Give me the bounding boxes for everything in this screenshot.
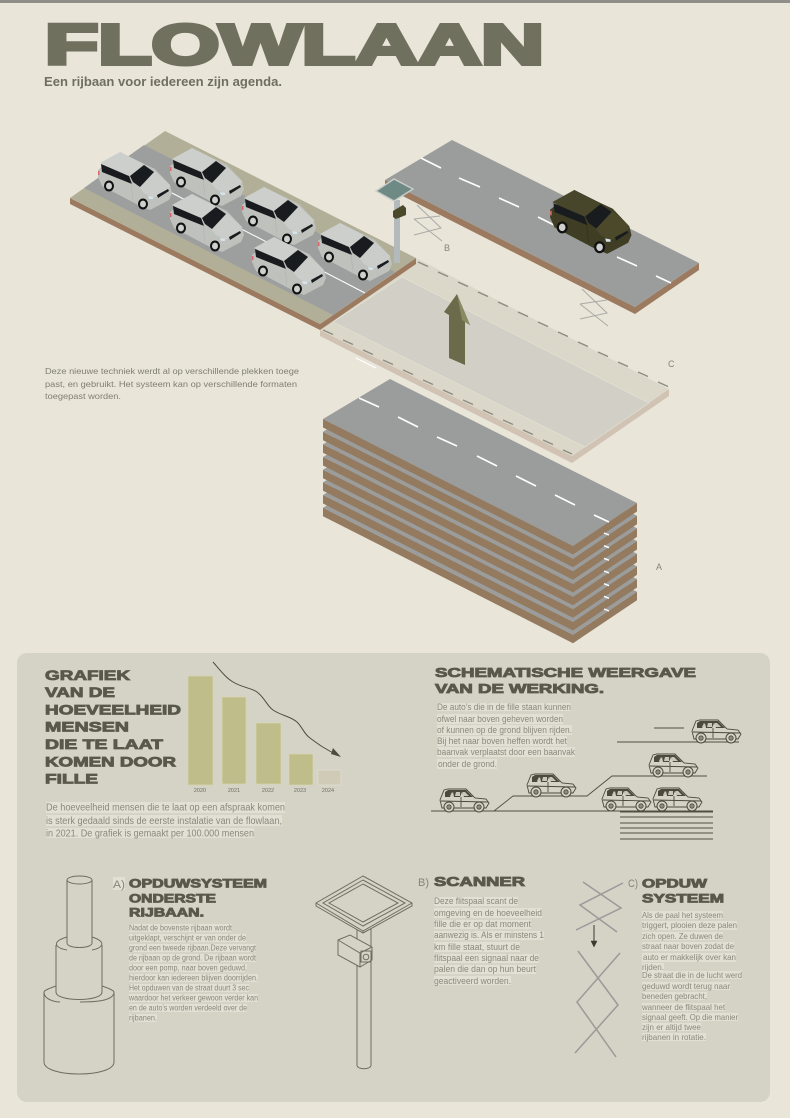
heading opduwsysteem: OPDUWSYSTEEM bbox=[129, 876, 267, 890]
label A): A) bbox=[113, 879, 125, 891]
text A bbox=[128, 924, 258, 1022]
text C: Als de paal het systeem bbox=[642, 910, 723, 920]
text B: aanwezig is. Als er minstens 1 bbox=[434, 930, 544, 940]
text C: auto er makkelijk over kan bbox=[643, 952, 736, 962]
middle platform bbox=[320, 258, 669, 463]
label B: B bbox=[444, 243, 450, 253]
text B: geactiveerd worden. bbox=[434, 976, 511, 986]
text C: geduwd wordt terug naar bbox=[642, 981, 730, 991]
text C: De straat die in de lucht werd bbox=[642, 970, 742, 980]
intro paragraph: past, en gebruikt. Het systeem kan op verschillende formaten bbox=[45, 379, 297, 389]
upper road with dark car bbox=[385, 140, 699, 314]
schematic paragraph: onder de grond. bbox=[438, 759, 497, 769]
left road with traffic jam bbox=[70, 131, 416, 330]
text A: en de auto’s worden verdeeld over de bbox=[129, 1004, 247, 1012]
text C: signaal geeft. Op die manier bbox=[642, 1012, 738, 1022]
text B: Deze flitspaal scant de bbox=[434, 896, 518, 906]
intro paragraph: toegepast worden. bbox=[45, 391, 121, 401]
text C: triggert, plooien deze palen bbox=[642, 920, 737, 930]
car 1 bbox=[98, 152, 172, 210]
text B: flitspaal een signaal naar de bbox=[434, 953, 539, 963]
label B): B) bbox=[418, 877, 429, 889]
schematic paragraph: Bij het naar boven heffen wordt het bbox=[437, 736, 567, 746]
chart paragraph: is sterk gedaald sinds de eerste instalatie van de flowlaan, bbox=[46, 816, 282, 827]
icon: telescopic cylinder bbox=[44, 876, 114, 1074]
line car d bbox=[653, 788, 702, 811]
schematic diagram bbox=[431, 720, 741, 839]
car 6 bbox=[318, 223, 392, 281]
schematic heading bbox=[435, 665, 696, 696]
schematic heading: SCHEMATISCHE WEERGAVE bbox=[435, 665, 696, 680]
text C: zijn er altijd twee bbox=[642, 1022, 701, 1032]
text C: wanneer de flitspaal het bbox=[641, 1002, 726, 1012]
text A: Nadat de bovenste rijbaan wordt bbox=[129, 924, 233, 932]
schematic paragraph: De auto’s die in de fille staan kunnen bbox=[437, 702, 571, 712]
icon: scissor lift closed and open bbox=[575, 882, 623, 1057]
text A: hierdoor kan iedereen blijven doorrijden. bbox=[129, 974, 258, 982]
arrow up bbox=[444, 294, 470, 365]
heading opduw systeem bbox=[642, 876, 724, 906]
chart paragraph: in 2021. De grafiek is gemaakt per 100.000 mensen bbox=[46, 828, 254, 840]
arrow down bbox=[591, 925, 597, 947]
schematic paragraph: ofwel naar boven geheven worden bbox=[437, 714, 563, 724]
line car f bbox=[692, 720, 741, 743]
text C: rijden. bbox=[642, 962, 664, 972]
chart heading: VAN DE bbox=[45, 684, 115, 700]
subtitle: Een rijbaan voor iedereen zijn agenda. bbox=[44, 74, 282, 89]
bar chart: 2020 bbox=[194, 788, 206, 794]
text B: km fille staat, stuurt de bbox=[434, 942, 520, 952]
scissor lift C bbox=[580, 289, 608, 326]
scanner pole on road bbox=[376, 179, 413, 263]
intro paragraph bbox=[45, 366, 299, 401]
schematic paragraph: of kunnen op de grond blijven rijden. bbox=[437, 725, 572, 735]
line car c bbox=[602, 788, 651, 811]
icon: scanner pole bbox=[316, 876, 412, 1069]
chart heading: MENSEN bbox=[45, 718, 129, 734]
top edge bar bbox=[0, 0, 790, 3]
bottom panel bbox=[17, 653, 770, 1102]
scissor lift B bbox=[414, 205, 442, 241]
dark car bbox=[550, 190, 632, 254]
bar chart: 2024 bbox=[322, 788, 334, 794]
chart heading: GRAFIEK bbox=[45, 667, 130, 683]
bar chart: 2021 bbox=[228, 788, 240, 794]
text B: omgeving en de hoeveelheid bbox=[434, 908, 542, 918]
text A: uitgeklapt, verschijnt er van onder de bbox=[129, 934, 246, 942]
label C): C) bbox=[628, 878, 638, 890]
white dash behind platform bbox=[356, 358, 376, 368]
text C: straat naar boven zodat de bbox=[642, 941, 734, 951]
heading opduwsysteem bbox=[129, 876, 267, 920]
text B: palen die dan op hun beurt bbox=[434, 964, 536, 974]
schematic paragraph bbox=[437, 702, 575, 769]
schematic paragraph: baanvak verplaatst door een baanvak bbox=[437, 747, 575, 757]
car 2 bbox=[170, 148, 244, 206]
text A: Het opduwen van de straat duurt 3 sec bbox=[129, 984, 249, 992]
car 4 bbox=[242, 187, 316, 245]
heading opduw systeem: OPDUW bbox=[642, 876, 708, 890]
text C bbox=[641, 910, 742, 1042]
text B bbox=[434, 896, 544, 986]
chart heading bbox=[45, 667, 181, 786]
label C: C bbox=[668, 359, 675, 369]
line car e bbox=[649, 754, 698, 777]
text A: rijbanen. bbox=[129, 1014, 157, 1022]
chart heading: DIE TE LAAT bbox=[45, 736, 164, 752]
car 5 bbox=[252, 237, 326, 295]
heading opduw systeem: SYSTEEM bbox=[642, 892, 724, 906]
line car b bbox=[527, 774, 576, 797]
intro paragraph: Deze nieuwe techniek werdt al op verschillende plekken toege bbox=[45, 366, 299, 376]
chart paragraph bbox=[46, 802, 285, 840]
label A: A bbox=[656, 562, 662, 572]
arrow line bbox=[654, 727, 684, 729]
text A: de rijbaan op de grond. De rijbaan wordt bbox=[129, 954, 257, 962]
bar chart bbox=[188, 662, 341, 794]
heading opduwsysteem: ONDERSTE bbox=[129, 892, 216, 906]
bar chart: 2022 bbox=[262, 788, 274, 794]
car 3 bbox=[170, 194, 244, 252]
text A: waardoor het verkeer gewoon verder kan bbox=[128, 994, 258, 1002]
text A: door een pomp, naar boven geduwd, bbox=[129, 964, 247, 972]
text C: zich open. Ze duwen de bbox=[642, 931, 723, 941]
text A: grond een tweede rijbaan.Deze vervangt bbox=[129, 944, 257, 952]
trend arrow bbox=[213, 662, 341, 757]
title: FLOWLAAN bbox=[45, 13, 544, 77]
chart heading: FILLE bbox=[45, 770, 98, 786]
text B: fille die er op dat moment bbox=[434, 919, 531, 929]
chart heading: HOEVEELHEID bbox=[45, 702, 181, 718]
heading scanner: SCANNER bbox=[434, 874, 526, 889]
line car a bbox=[440, 789, 489, 812]
road stack bbox=[323, 379, 637, 643]
text C: beneden gebracht, bbox=[642, 991, 707, 1001]
chart heading: KOMEN DOOR bbox=[45, 754, 176, 770]
chart paragraph: De hoeveelheid mensen die te laat op een afspraak komen bbox=[46, 802, 285, 814]
text C: rijbanen in rotatie. bbox=[642, 1032, 706, 1042]
schematic heading: VAN DE WERKING. bbox=[435, 681, 604, 696]
heading opduwsysteem: RIJBAAN. bbox=[129, 906, 204, 920]
bar chart: 2023 bbox=[294, 788, 306, 794]
